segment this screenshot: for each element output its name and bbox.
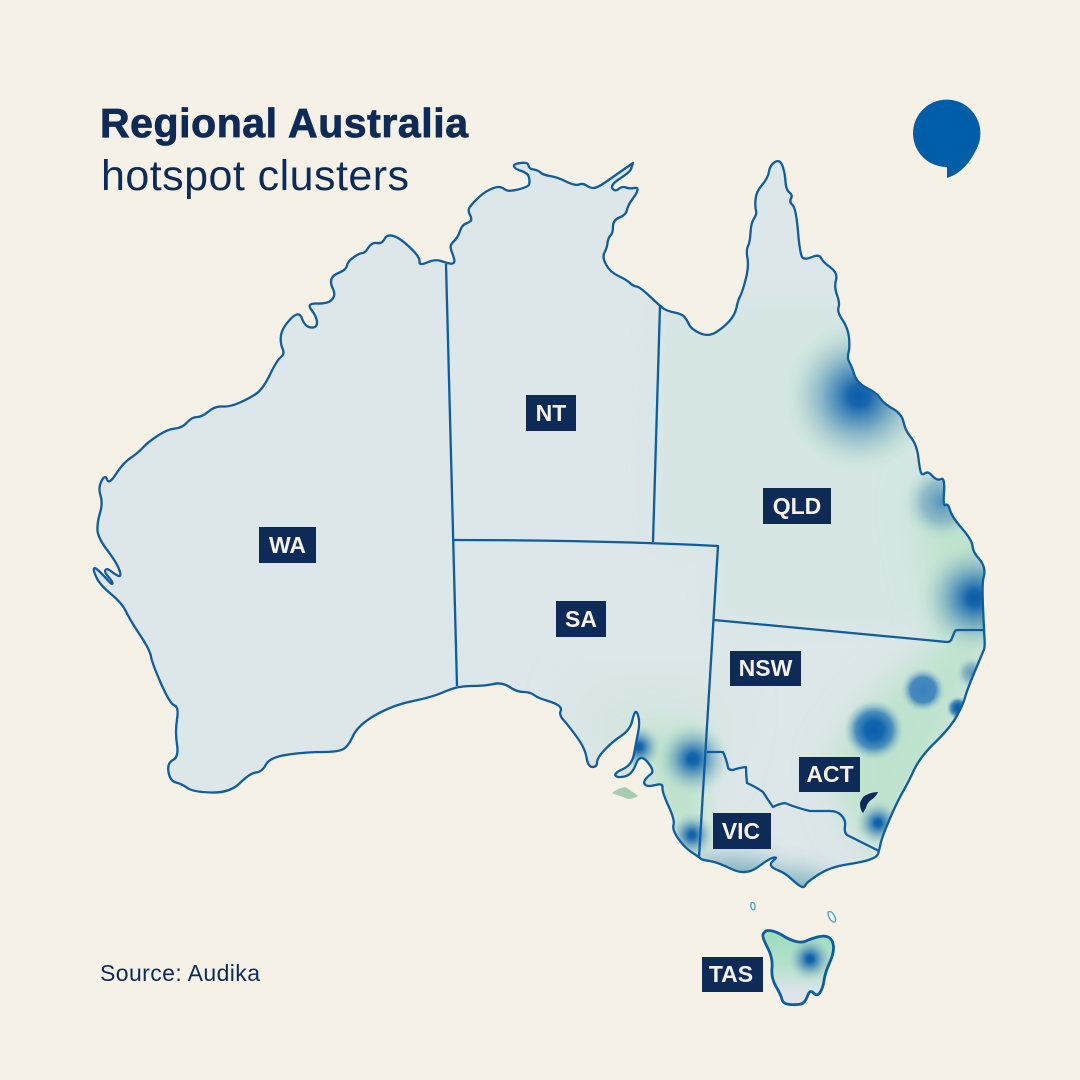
hotspot: central NSW [845, 702, 902, 758]
label: ACT [799, 757, 860, 792]
source note: Source: Audika [100, 960, 260, 986]
map: Tasmania [763, 930, 834, 1005]
title [100, 100, 469, 200]
label: SA [556, 601, 606, 637]
label: WA: WA [269, 532, 306, 558]
label: NT: NT [536, 400, 566, 426]
marker: ACT shape [860, 792, 878, 813]
label: SA: SA [565, 606, 597, 632]
label: VIC [713, 813, 771, 849]
hotspot: NSW coast [947, 697, 964, 718]
heat layer: hotspot clusters [610, 322, 984, 886]
hotspot: south coast NSW [858, 804, 892, 844]
coastline outline [94, 161, 985, 887]
label: QLD: QLD [773, 493, 821, 519]
hotspot: SA Limestone Coast [674, 816, 713, 854]
label: VIC: VIC [722, 818, 760, 844]
label: QLD [763, 488, 831, 524]
label: WA [259, 527, 316, 563]
hotspot: SA Riverland [662, 726, 726, 790]
label: ACT: ACT [806, 761, 854, 787]
title: Regional Australia [100, 100, 469, 146]
title: hotspot clusters [101, 152, 409, 200]
island: King Island [751, 902, 755, 910]
hotspot: central Queensland coast [908, 474, 960, 534]
hotspot: south-east Queensland [925, 551, 984, 646]
hotspot: north Queensland [792, 330, 910, 462]
label: TAS [702, 957, 763, 992]
island: Kangaroo Island [612, 787, 638, 799]
hotspot: northern NSW inland [902, 670, 944, 710]
state borders [446, 264, 984, 857]
label: NT [526, 395, 576, 431]
label: NSW [730, 651, 801, 686]
hotspot: north coast NSW [958, 659, 978, 686]
map: mainland Australia [94, 161, 1033, 919]
label: TAS: TAS [709, 961, 753, 987]
island: Flinders Island [828, 912, 836, 922]
hotspot: SA gulf [630, 726, 658, 767]
icon: speech bubble logo [913, 100, 980, 178]
label: NSW: NSW [739, 655, 793, 681]
